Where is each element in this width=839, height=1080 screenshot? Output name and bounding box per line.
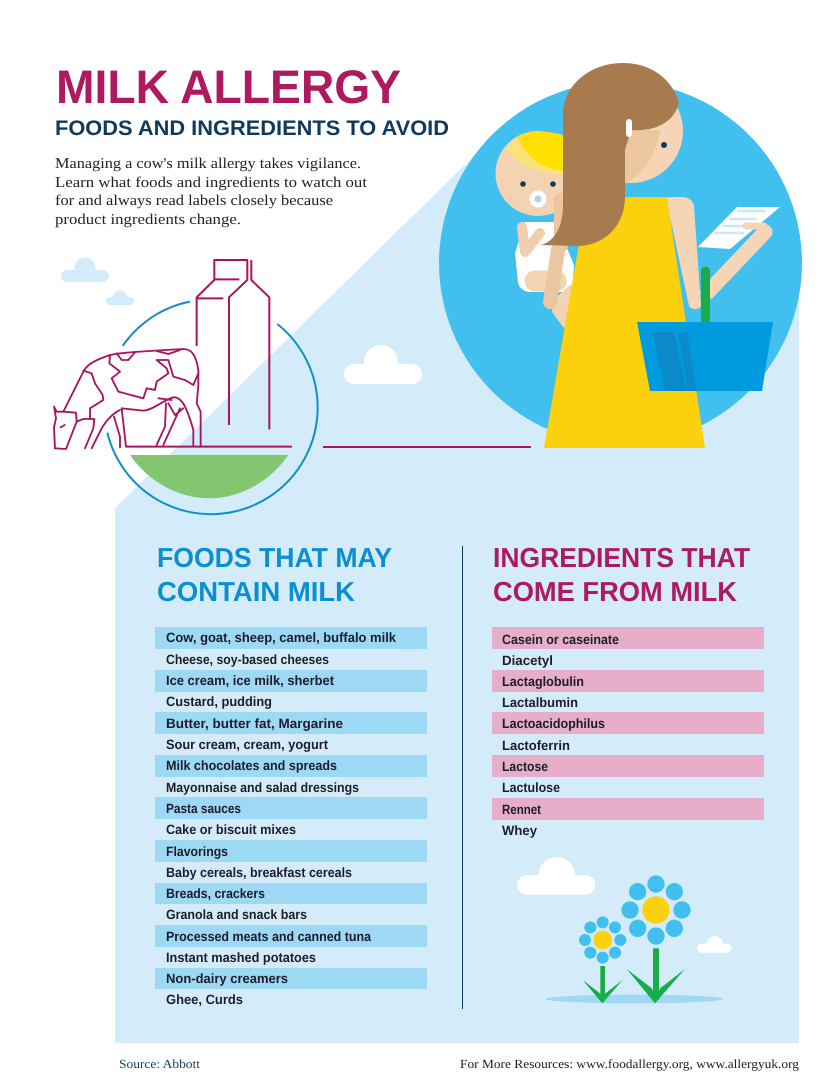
green bowl <box>130 455 288 498</box>
ground line right <box>323 446 531 448</box>
blue arcs <box>107 302 318 514</box>
subtitle: FOODS AND INGREDIENTS TO AVOID <box>55 117 449 140</box>
list: ingredients: Lactoferrin <box>502 738 570 753</box>
list: ingredients: Lactoacidophilus <box>502 716 605 731</box>
list: ingredients: Whey <box>502 823 537 838</box>
list: foods: Sour cream, cream, yogurt <box>166 737 328 752</box>
blue circle <box>439 82 802 444</box>
milk carton <box>197 260 269 429</box>
basket <box>637 322 773 391</box>
list: ingredients: Lactose <box>502 759 548 774</box>
shadow <box>546 995 723 1003</box>
heading: foods <box>157 542 392 607</box>
list: foods: Breads, crackers <box>166 886 265 901</box>
list: foods: Non-dairy creamers <box>166 971 288 986</box>
illustration: mother and baby <box>439 63 802 448</box>
list: foods: Milk chocolates and spreads <box>166 758 337 773</box>
receipt <box>698 207 780 249</box>
intro text: Learn what foods and ingredients to watch out <box>55 175 368 191</box>
list: foods: Granola and snack bars <box>166 907 307 922</box>
heading: ingredients <box>493 542 750 607</box>
source: Source: Abbott <box>119 1057 201 1071</box>
list: foods: Cow, goat, sheep, camel, buffalo milk <box>166 630 396 645</box>
cloud <box>344 345 422 384</box>
list: ingredients: Rennet <box>502 802 541 817</box>
resources: For More Resources: www.foodallergy.org, www.allergyuk.org <box>460 1057 800 1071</box>
cloud <box>517 857 595 895</box>
intro text <box>55 156 368 228</box>
mother's face <box>579 79 683 183</box>
mother's arm holding baby <box>550 200 561 302</box>
list: ingredients <box>492 627 764 838</box>
list: ingredients: Lactulose <box>502 780 560 795</box>
forearm with list <box>708 232 765 292</box>
list: foods: Mayonnaise and salad dressings <box>166 780 359 795</box>
list: foods: Ice cream, ice milk, sherbet <box>166 673 334 688</box>
list: foods: Pasta sauces <box>166 801 241 816</box>
list: foods <box>155 627 427 1007</box>
yellow dress <box>544 197 705 448</box>
ground line <box>126 444 292 450</box>
list: foods: Custard, pudding <box>166 694 272 709</box>
heading: ingredients: COME FROM MILK <box>493 576 737 607</box>
intro text: product ingredients change. <box>55 212 241 228</box>
large flower <box>621 875 691 1003</box>
title: MILK ALLERGY <box>56 60 401 113</box>
mother's arm <box>666 197 701 309</box>
list: ingredients: Diacetyl <box>502 653 553 668</box>
hair <box>540 63 679 246</box>
illustration: cow, milk carton and circle <box>54 260 318 514</box>
small flower <box>579 916 626 1003</box>
heading: ingredients: INGREDIENTS THAT <box>493 542 750 573</box>
illustration: flowers and clouds <box>517 857 732 1003</box>
heading: foods: CONTAIN MILK <box>157 576 355 607</box>
list: foods: Baby cereals, breakfast cereals <box>166 865 352 880</box>
list: ingredients: Lactalbumin <box>502 695 578 710</box>
cloud <box>106 290 134 305</box>
list: foods: Cake or biscuit mixes <box>166 822 296 837</box>
intro text: for and always read labels closely because <box>55 193 333 209</box>
hair clip <box>626 119 632 137</box>
list: foods: Flavorings <box>166 844 228 859</box>
heading: foods: FOODS THAT MAY <box>157 542 392 573</box>
list: foods: Processed meats and canned tuna <box>166 929 371 944</box>
background panel <box>115 150 799 1043</box>
list: foods: Instant mashed potatoes <box>166 950 316 965</box>
baby <box>496 131 580 330</box>
basket handle <box>701 271 710 325</box>
cow <box>54 349 201 449</box>
list: foods: Butter, butter fat, Margarine <box>166 716 343 731</box>
intro text: Managing a cow's milk allergy takes vigilance. <box>55 156 361 172</box>
list: foods: Cheese, soy-based cheeses <box>166 652 329 667</box>
list: foods: Ghee, Curds <box>166 992 243 1007</box>
list: ingredients: Lactaglobulin <box>502 674 584 689</box>
divider <box>462 546 464 1009</box>
list: ingredients: Casein or caseinate <box>502 632 619 647</box>
cloud <box>61 258 109 282</box>
cloud <box>697 936 732 953</box>
